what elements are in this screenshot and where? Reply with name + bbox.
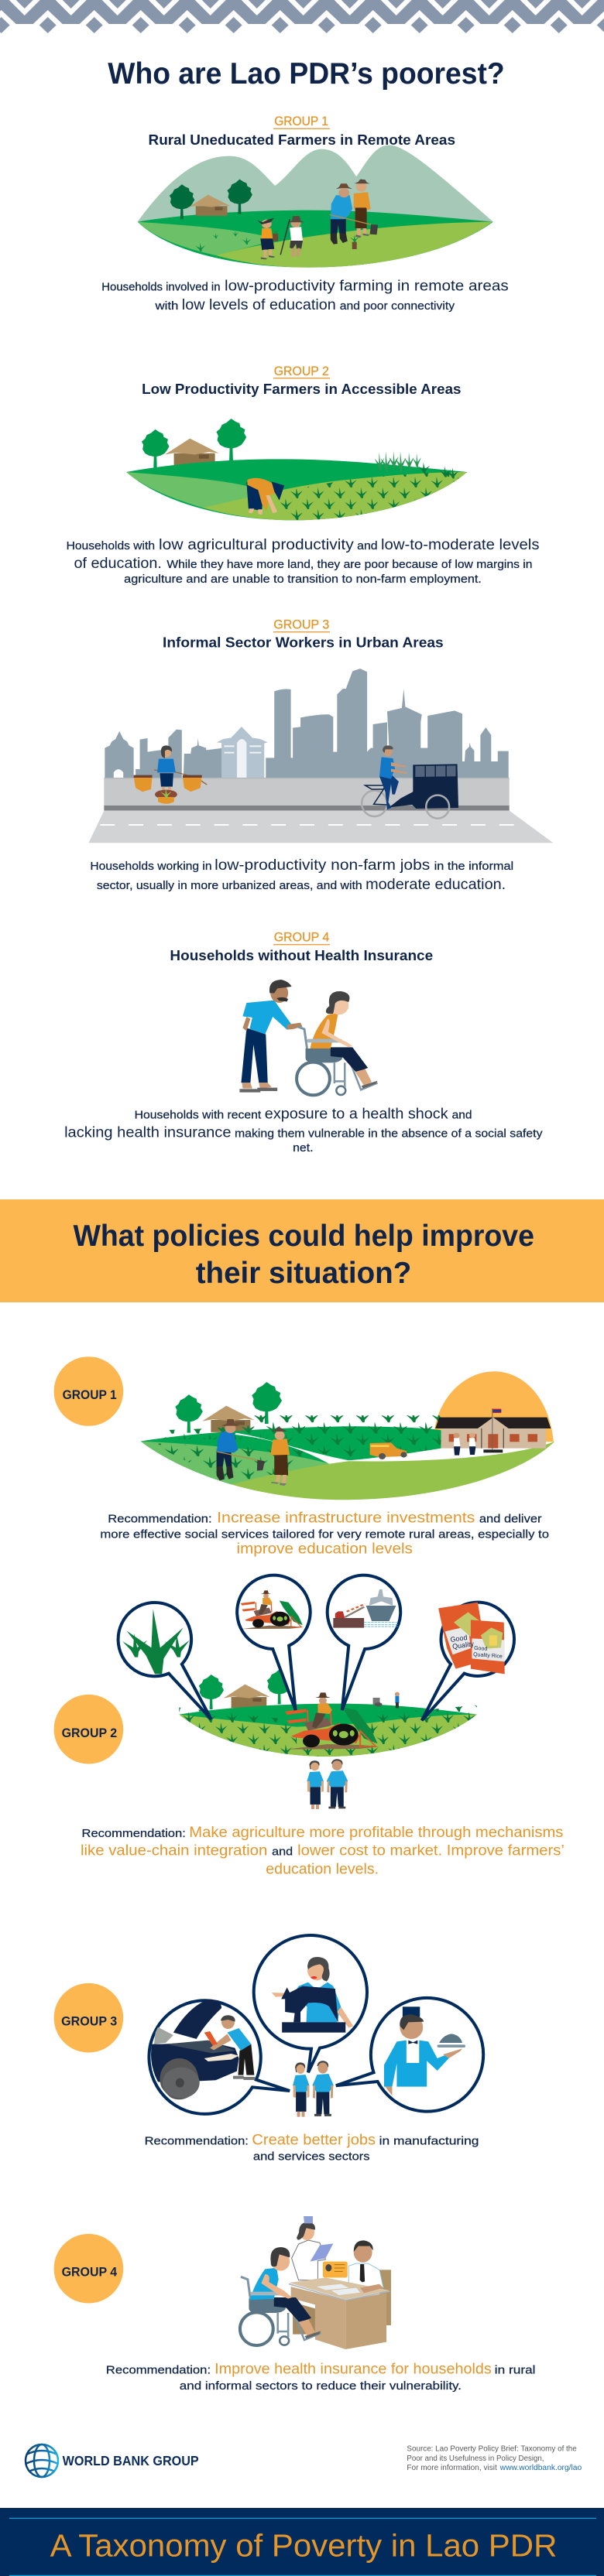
badge: group 1: GROUP 1: [63, 1387, 117, 1402]
group 2 recommendation text: Recommendation:: [82, 1827, 186, 1840]
group 4 description: [64, 1106, 543, 1155]
group 4 recommendation text: [106, 2362, 536, 2393]
group 2 recommendation text: lower cost to market. Improve farmers’: [297, 1843, 565, 1859]
group 4 heading: Households without Health Insurance: [170, 947, 433, 963]
group 1 description: and poor connectivity: [340, 299, 455, 313]
section banner: What policies could help improve their situation?: their situation?: [196, 1257, 411, 1290]
decorative top pattern band: [0, 0, 604, 33]
group 4 description: lacking health insurance: [64, 1124, 231, 1141]
illustration: man pushing woman in a wheelchair: [239, 980, 378, 1095]
group 1 recommendation text: Increase infrastructure investments: [217, 1510, 475, 1527]
badge: group 4: [54, 2234, 123, 2303]
group 3 recommendation text: Create better jobs: [252, 2133, 376, 2149]
badge: group 3: GROUP 3: [61, 2014, 117, 2029]
badge: group 2: [54, 1695, 123, 1764]
panel: group 1 profile: [101, 115, 509, 313]
panel: group 2 profile: [67, 364, 540, 586]
group 3 description: [90, 857, 513, 893]
group 3 description: moderate education.: [365, 877, 506, 893]
group 2 description: agriculture and are unable to transition to non-farm employment.: [124, 573, 482, 586]
badge: group 3: [54, 1983, 123, 2052]
illustration: farmers, road and school: [141, 1371, 554, 1500]
group 3 heading: Informal Sector Workers in Urban Areas: [163, 635, 444, 651]
source note: www.worldbank.org/lao: [499, 2464, 582, 2472]
group 4 description: exposure to a health shock: [265, 1106, 448, 1122]
group 2 description: low agricultural productivity: [159, 537, 354, 553]
group 4 description: Households with recent: [135, 1108, 262, 1121]
group 2 description: of education.: [74, 556, 162, 572]
panel: group 4 profile: [64, 931, 543, 1155]
rice bag labels: Good: [450, 1634, 468, 1644]
illustration: farm with value-chain speech bubbles: [118, 1575, 514, 1757]
panel: group 2 recommendation: [54, 1575, 565, 1878]
footer banner: A Taxonomy of Poverty in Lao PDR: A Taxonomy of Poverty in Lao PDR: [50, 2527, 557, 2563]
badge: group 2: GROUP 2: [62, 1726, 117, 1740]
group 1 recommendation text: and deliver: [479, 1513, 542, 1526]
group 2 recommendation text: education levels.: [266, 1862, 379, 1878]
group 1 label: GROUP 1: [274, 115, 328, 128]
group 3 recommendation text: and services sectors: [253, 2150, 370, 2164]
source note: For more information, visit: [407, 2464, 497, 2472]
badge: group 4: GROUP 4: [62, 2265, 118, 2280]
logo: World Bank Group: WORLD BANK GROUP: [63, 2453, 199, 2468]
rice bag labels: Good: [474, 1646, 488, 1652]
source note: [407, 2445, 582, 2472]
panel: group 4 recommendation: [54, 2216, 536, 2393]
group 2 description: [67, 537, 540, 586]
section banner: What policies could help improve their situation?: [0, 1199, 604, 1302]
group 1 recommendation text: more effective social services tailored for very remote rural areas, especially to: [100, 1528, 549, 1541]
group 2 label: GROUP 2: [274, 364, 329, 378]
group 4 description: net.: [293, 1141, 313, 1155]
group 1 recommendation text: Recommendation:: [108, 1513, 212, 1526]
illustration: job speech bubbles for mechanic, seamstress and waiter: [149, 1935, 483, 2117]
group 1 heading: Rural Uneducated Farmers in Remote Areas: [149, 132, 455, 148]
illustration: farmer planting rice: [126, 419, 467, 520]
rice bag labels: Quality: [451, 1640, 475, 1651]
group 4 recommendation text: Improve health insurance for households: [214, 2362, 492, 2378]
group 2 description: While they have more land, they are poor because of low margins in: [166, 558, 533, 571]
group 4 recommendation text: in rural: [495, 2364, 536, 2377]
group 2 recommendation text: Make agriculture more profitable through mechanisms: [189, 1825, 563, 1841]
group 3 recommendation text: [145, 2133, 479, 2164]
panel: group 3 profile: [88, 618, 553, 893]
group 3 recommendation text: Recommendation:: [145, 2135, 249, 2148]
rice bag labels: [450, 1634, 503, 1660]
group 2 description: low-to-moderate levels: [381, 537, 539, 553]
group 1 description: low levels of education: [182, 297, 336, 313]
group 1 description: with: [154, 299, 178, 313]
panel: group 1 recommendation: [54, 1356, 554, 1557]
group 4 description: and: [452, 1108, 472, 1121]
group 4 description: making them vulnerable in the absence of a social safety: [235, 1127, 543, 1140]
group 1 description: Households involved in: [101, 281, 220, 294]
group 3 description: low-productivity non-farm jobs: [214, 857, 430, 874]
group 1 description: low-productivity farming in remote areas: [225, 279, 509, 295]
panel: group 3 recommendation: [54, 1935, 483, 2164]
group 2 recommendation text: and: [272, 1846, 293, 1859]
group 2 heading: Low Productivity Farmers in Accessible Areas: [142, 381, 462, 397]
source note: Poor and its Usefulness in Policy Design,: [407, 2455, 544, 2463]
source note: Source: Lao Poverty Policy Brief: Taxonomy of the: [407, 2445, 577, 2454]
group 4 recommendation text: Recommendation:: [106, 2364, 211, 2377]
group 3 description: in the informal: [434, 860, 513, 873]
illustration: patient, nurse and doctor at a desk: [240, 2216, 391, 2349]
title: Who are Lao PDR's poorest?: Who are Lao PDR’s poorest?: [108, 57, 505, 91]
footer banner: A Taxonomy of Poverty in Lao PDR: [0, 2508, 604, 2576]
logo: World Bank Group: [26, 2444, 199, 2477]
group 2 recommendation text: [81, 1825, 565, 1878]
group 3 recommendation text: in manufacturing: [379, 2135, 479, 2148]
group 2 description: Households with: [67, 539, 155, 552]
group 4 label: GROUP 4: [274, 931, 329, 945]
illustration: family farming in the mountains: [138, 145, 493, 268]
group 2 recommendation text: like value-chain integration: [81, 1843, 267, 1859]
illustration: farming couple: [307, 1759, 348, 1809]
illustration: city street with vendor and cyclist: [88, 669, 553, 843]
rice bag labels: Quality Rice: [473, 1652, 503, 1660]
group 2 description: and: [357, 539, 378, 552]
section banner: What policies could help improve their situation?: What policies could help improve: [73, 1220, 534, 1253]
group 1 recommendation text: [100, 1510, 549, 1557]
group 3 label: GROUP 3: [273, 618, 329, 632]
group 1 description: [101, 279, 509, 313]
group 3 description: sector, usually in more urbanized areas, and with: [97, 879, 362, 892]
group 1 recommendation text: improve education levels: [237, 1541, 413, 1557]
group 4 recommendation text: and informal sectors to reduce their vulnerability.: [180, 2379, 462, 2393]
badge: group 1: [54, 1356, 123, 1426]
group 3 description: Households working in: [90, 860, 212, 873]
